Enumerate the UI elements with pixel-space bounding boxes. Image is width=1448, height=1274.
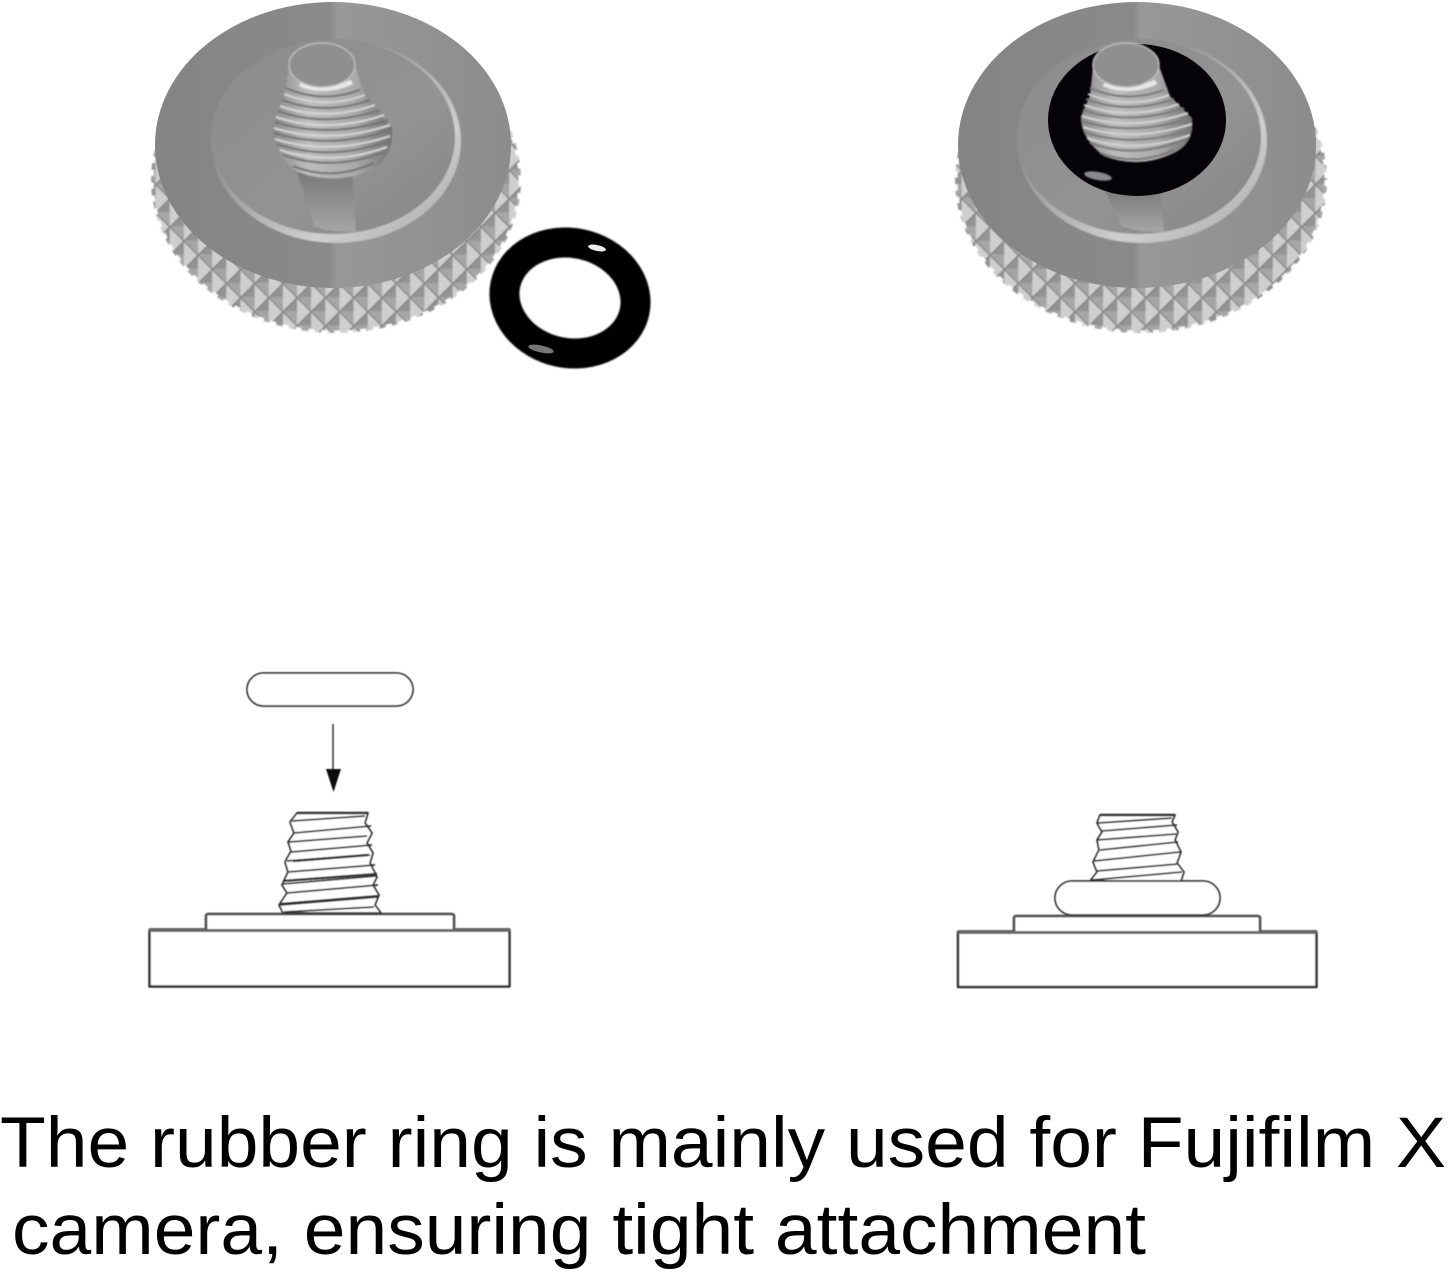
diagram: ring above stud before fitting	[149, 673, 510, 986]
caption text	[0, 1104, 1446, 1270]
rubber ring seated on disc	[1048, 44, 1226, 196]
top face of button	[155, 2, 511, 288]
threaded stud	[1081, 43, 1192, 162]
diagram: ring fitted on stud	[958, 815, 1317, 987]
caption line 2: camera, ensuring tight attachment	[12, 1191, 1146, 1270]
photo: shutter button with rubber ring fitted	[955, 2, 1327, 333]
rubber ring compressed on flange	[1055, 881, 1220, 915]
raised centre disc	[211, 39, 461, 243]
button base	[958, 932, 1317, 987]
raised centre disc	[1017, 39, 1267, 243]
threaded stud	[279, 813, 381, 913]
icon: black rubber O-ring	[494, 230, 646, 366]
button base	[149, 930, 510, 986]
button flange	[206, 914, 454, 929]
threaded stud	[1090, 815, 1184, 881]
photo: shutter button with separate rubber ring	[151, 2, 521, 333]
rubber ring side view	[247, 673, 413, 706]
knurled rim	[955, 27, 1327, 333]
top face of button	[958, 2, 1316, 288]
arrow pointing down	[326, 724, 341, 792]
caption line 1: The rubber ring is mainly used for Fujifilm X	[0, 1104, 1446, 1183]
threaded stud	[273, 43, 392, 179]
knurled rim	[151, 27, 521, 333]
button flange	[1014, 916, 1260, 931]
